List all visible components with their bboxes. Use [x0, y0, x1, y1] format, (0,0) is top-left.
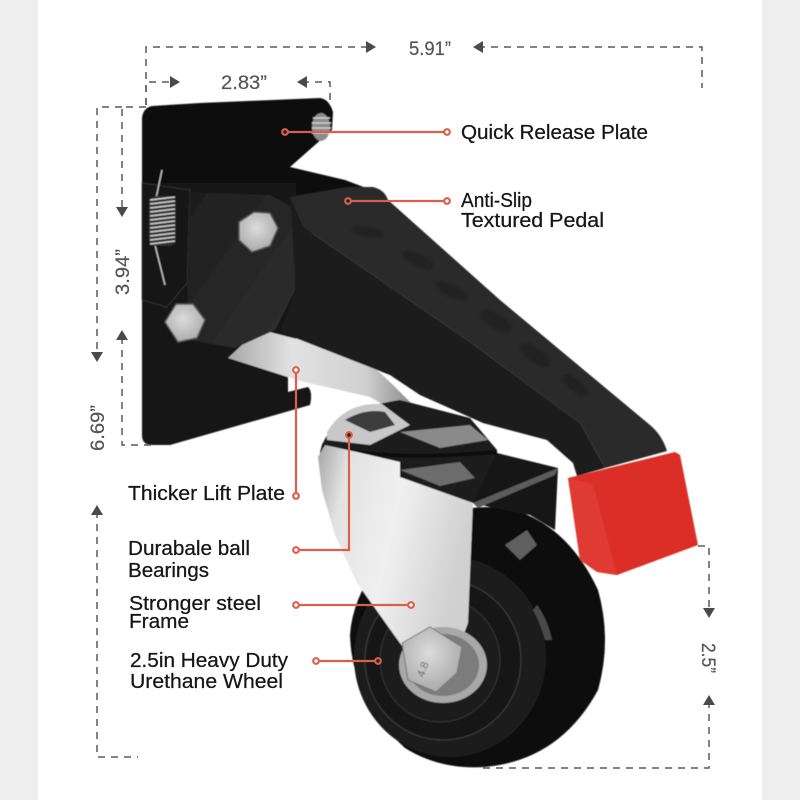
- callout: quick release plate: Quick Release Plate: [461, 122, 648, 144]
- dimension: 3.94 inch height: 3.94”: [113, 249, 134, 295]
- wheel: [350, 507, 605, 767]
- callout: stronger steel frame: [129, 593, 414, 633]
- gusset: [473, 453, 558, 530]
- swivel ring: [320, 400, 497, 503]
- steel frame: [318, 445, 473, 650]
- dimension: 2.5 inch wheel height: 2.5”: [697, 643, 718, 673]
- callout: anti-slip textured pedal: Anti-Slip: [461, 190, 532, 212]
- callout: anti-slip textured pedal: [345, 190, 604, 232]
- product photo: caster with pedal: [142, 98, 698, 767]
- spring: [149, 170, 176, 285]
- dimension: 6.69 inch height: [88, 107, 138, 757]
- red rubber cap: [568, 452, 698, 575]
- callout: urethane wheel: 2.5in Heavy Duty: [130, 650, 288, 672]
- dimension: 2.5 inch wheel height: [477, 546, 718, 768]
- callout: thicker lift plate: [128, 367, 299, 505]
- spring plate: [142, 183, 190, 307]
- callout: durable ball bearings: Durabale ball: [128, 538, 250, 560]
- lift plate: [228, 330, 412, 412]
- dimension: 2.83 inch plate width: [146, 73, 330, 105]
- side bracket: [187, 192, 296, 348]
- callout: stronger steel frame: Stronger steel: [129, 593, 261, 615]
- callout: urethane wheel: [130, 650, 381, 693]
- pedal arm side: [280, 197, 605, 476]
- callout: urethane wheel: Urethane Wheel: [130, 671, 283, 693]
- callout: durable ball bearings: [128, 432, 352, 582]
- callout: quick release plate: [282, 122, 648, 144]
- callout: thicker lift plate: Thicker Lift Plate: [128, 483, 285, 505]
- callout: stronger steel frame: Frame: [129, 611, 189, 633]
- pedal top face: [290, 187, 667, 468]
- bracket backing: [142, 183, 296, 352]
- upper hex bolt: [239, 212, 278, 252]
- lower hex bolt: [165, 304, 205, 342]
- callout: durable ball bearings: Bearings: [128, 560, 209, 582]
- dimension: 2.83 inch plate width: 2.83”: [221, 73, 267, 94]
- dimension: 5.91 inch width: [146, 39, 702, 105]
- release screw: [312, 113, 331, 141]
- dimension: 6.69 inch height: 6.69”: [88, 405, 109, 451]
- wheel bolt: [399, 627, 487, 703]
- pedal dimples: [351, 224, 591, 400]
- wheel bolt: 4.8: [415, 660, 432, 679]
- callout: anti-slip textured pedal: Textured Pedal: [461, 210, 604, 232]
- dimension: 3.94 inch height: [113, 107, 152, 445]
- dimension: 5.91 inch width: 5.91”: [409, 39, 451, 60]
- lower back plate: [142, 300, 311, 445]
- top release plate: [142, 98, 385, 240]
